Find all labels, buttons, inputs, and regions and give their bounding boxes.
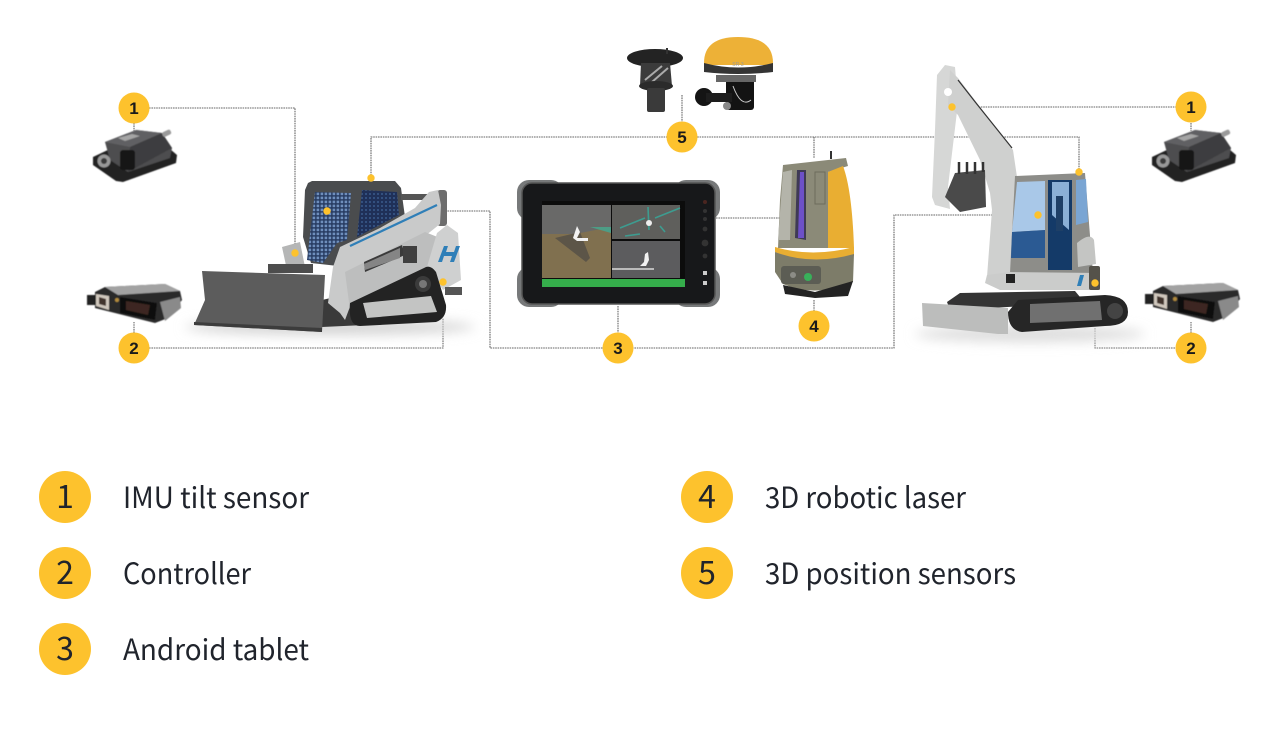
callout badges (118, 92, 1206, 364)
badge 1 right (1176, 92, 1206, 122)
badge 1 left: 1 (129, 99, 139, 118)
bucket (945, 170, 986, 212)
icon: left controller (87, 284, 182, 323)
small antenna (627, 48, 683, 112)
yellow housing (828, 166, 854, 248)
legend item 2: 2 (56, 548, 74, 594)
ground shadow (185, 319, 475, 335)
icon: android tablet (517, 180, 720, 307)
icon: 3D robotic laser (775, 151, 854, 298)
dozer blade (194, 271, 325, 332)
arm (932, 65, 958, 209)
badge 5: 5 (677, 128, 687, 147)
GNSS receiver (695, 37, 773, 110)
rear track (947, 291, 1085, 310)
badge 5 (666, 122, 698, 152)
badge 2 left (118, 332, 150, 364)
lift arm and body (328, 190, 441, 320)
legend item 4 (681, 471, 967, 523)
badge 2 right: 2 (1186, 339, 1196, 358)
boom (948, 70, 1017, 277)
front track (1008, 295, 1128, 332)
cab (1010, 173, 1093, 273)
connector lines (134, 95, 1191, 348)
legend item 1: IMU tilt sensor (123, 475, 310, 517)
rear panel with logo (427, 225, 461, 290)
icon: dual antenna position sensors (627, 37, 773, 112)
mini excavator (915, 65, 1145, 342)
rugged corners (517, 180, 720, 307)
sensor mount points (291, 103, 1099, 287)
legend item 5 (681, 547, 1016, 599)
track (350, 267, 446, 326)
badge 4 (798, 310, 830, 342)
badge 2 left: 2 (129, 339, 139, 358)
legend item 1 (39, 471, 310, 523)
legend item 2 (39, 547, 252, 599)
dozer blade (922, 303, 1008, 334)
screen (542, 201, 685, 287)
laser window (795, 170, 806, 240)
base (775, 252, 854, 291)
cab frame (303, 181, 405, 267)
legend item 5: 5 (698, 548, 716, 594)
engine cover (1077, 237, 1096, 267)
ground shadow (915, 326, 1145, 342)
badge 3 (602, 332, 634, 364)
cab windows (307, 192, 351, 263)
legend item 3 (39, 623, 309, 675)
side buttons (702, 200, 708, 285)
GNSS receiver: SR-3 (732, 62, 744, 68)
badge 2 right (1176, 332, 1206, 364)
badge 3: 3 (613, 339, 623, 358)
green status bar (542, 279, 685, 287)
lower body (985, 272, 1100, 290)
icon: left IMU tilt sensor (93, 129, 177, 182)
undercarriage (322, 290, 365, 327)
legend item 4: 3D robotic laser (765, 475, 967, 517)
legend item 4: 4 (698, 472, 716, 518)
legend item 5: 3D position sensors (765, 551, 1016, 593)
legend item 2: Controller (123, 551, 252, 593)
legend item 3: Android tablet (123, 627, 309, 669)
head (778, 158, 848, 248)
legend item 1: 1 (56, 472, 74, 518)
icon: right controller (1145, 283, 1240, 322)
compact track loader (185, 181, 475, 335)
legend item 3: 3 (56, 624, 74, 670)
engine block (282, 242, 306, 272)
badge 1 left (118, 92, 150, 124)
icon: right IMU tilt sensor (1152, 129, 1236, 182)
tablet body (522, 183, 715, 304)
legend (39, 471, 1016, 675)
badge 1 right: 1 (1186, 98, 1196, 117)
badge 4: 4 (809, 317, 819, 336)
